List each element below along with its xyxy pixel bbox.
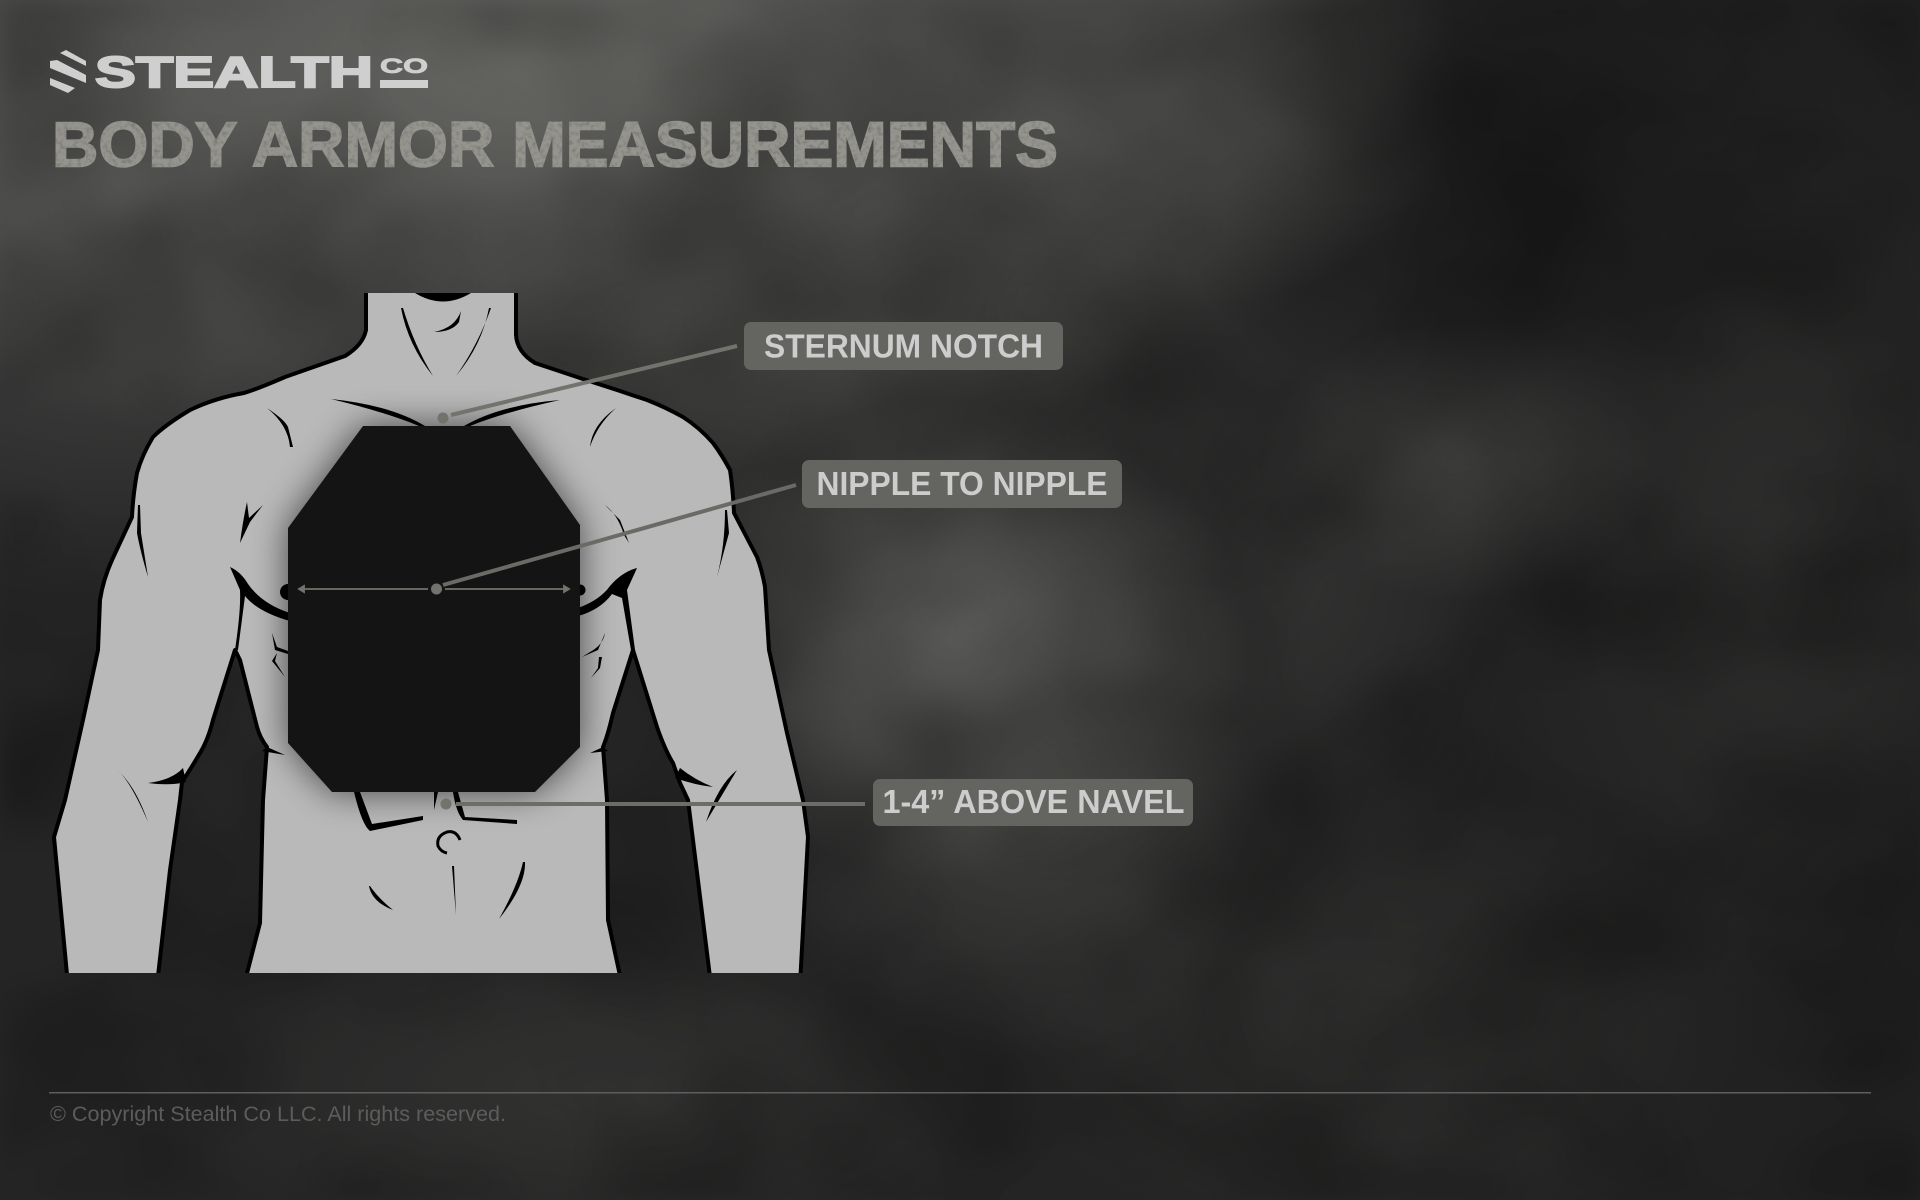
muscle lines <box>117 293 737 919</box>
callout: sternum notch <box>744 322 1063 370</box>
marker: nipple to nipple <box>299 485 796 594</box>
logo: Stealth Co <box>50 48 428 97</box>
callout: above navel: 1-4” ABOVE NAVEL <box>882 783 1184 820</box>
torso silhouette <box>54 280 808 985</box>
callout: nipple to nipple: NIPPLE TO NIPPLE <box>816 465 1108 502</box>
armor plate <box>288 426 580 792</box>
title: BODY ARMOR MEASUREMENTS <box>52 108 1058 180</box>
marker: above navel <box>440 798 865 810</box>
plate shadow on body <box>288 426 580 792</box>
copyright text: © Copyright Stealth Co LLC. All rights reserved. <box>50 1103 506 1126</box>
logo suffix <box>380 55 428 88</box>
body illustration <box>54 280 808 985</box>
logo wordmark: STEALTH <box>95 48 373 97</box>
icon: logo stripes <box>50 50 86 93</box>
navel mark <box>438 832 460 853</box>
callout: sternum notch: STERNUM NOTCH <box>764 328 1043 364</box>
logo suffix: CO <box>380 55 428 78</box>
marker: sternum notch <box>438 346 737 424</box>
